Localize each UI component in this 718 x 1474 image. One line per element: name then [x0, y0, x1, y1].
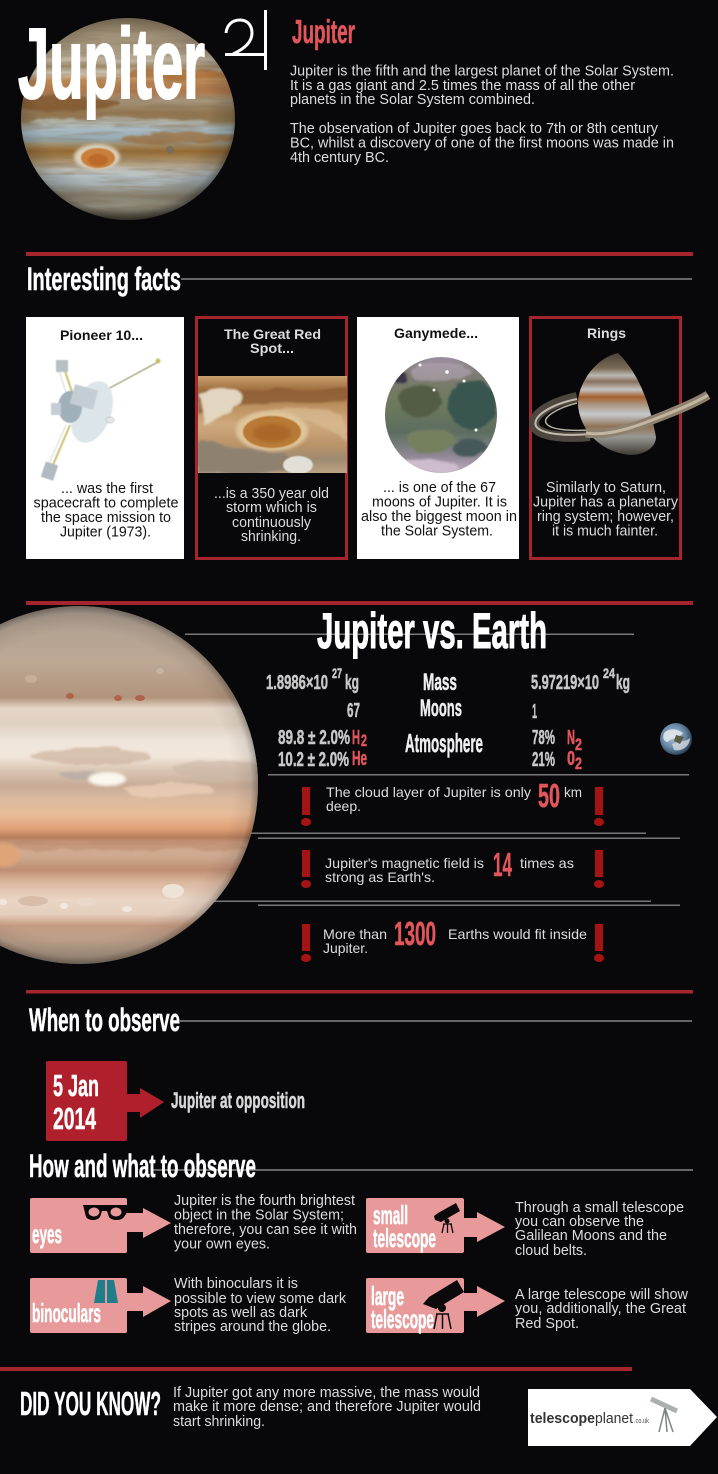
logo: telescopeplanet: .co.uk — [634, 1418, 649, 1425]
method text: small telescope: Galilean Moons and the — [515, 1227, 667, 1244]
method text: small telescope: cloud belts. — [515, 1242, 587, 1259]
method text: eyes: your own eyes. — [174, 1236, 270, 1252]
callout: opposition date: 5 Jan — [53, 1068, 99, 1103]
fact: magnetic field — [301, 846, 604, 888]
comparison table: atmosphere: 89.8 ± 2.0% — [278, 727, 350, 749]
intro text: Jupiter is the fifth and the largest planet of the Solar System. — [290, 62, 674, 80]
panel: Pioneer 10: ... was the first — [61, 480, 154, 497]
intro text: BC, whilst a discovery of one of the first moons was made in — [290, 134, 674, 152]
comparison table: mass: 24 — [603, 665, 615, 681]
big Jupiter planet image — [0, 606, 270, 965]
comparison table: atmosphere: H — [352, 727, 360, 749]
panel: Pioneer 10: Jupiter (1973). — [60, 524, 151, 540]
text: did you know — [173, 1384, 481, 1430]
intro text: It is a gas giant and 2.5 times the mass of all the other — [290, 77, 635, 94]
comparison table: atmosphere: 2 — [575, 754, 582, 773]
comparison table: mass: 27 — [332, 665, 342, 681]
method: eyes: eyes — [32, 1219, 62, 1249]
comparison table: atmosphere — [278, 727, 582, 773]
text: did you know: make it more dense; and therefore Jupiter would — [173, 1398, 481, 1415]
panel: The Great Red Spot: shrinking. — [241, 528, 301, 545]
fact: cloud layer: The cloud layer of Jupiter is only — [326, 784, 531, 800]
panel: Pioneer 10: Pioneer 10... — [60, 327, 143, 343]
heading: Did you know: DID YOU KNOW? — [20, 1385, 161, 1422]
image: Earth — [660, 723, 692, 755]
comparison table: atmosphere: N — [567, 727, 575, 749]
fact: magnetic field: 14 — [493, 846, 512, 883]
heading: How and what to observe: How and what to observe — [29, 1148, 256, 1184]
comparison table: mass: 5.97219×10 — [531, 672, 599, 694]
method: binoculars — [30, 1278, 171, 1333]
callout: opposition date — [46, 1061, 305, 1141]
method text: large telescope — [515, 1286, 688, 1332]
intro text: 4th century BC. — [290, 149, 389, 166]
comparison table: mass — [266, 665, 630, 696]
intro text — [290, 62, 674, 166]
comparison table: atmosphere: 21% — [532, 749, 555, 771]
panel: Ganymede: Ganymede... — [394, 325, 478, 341]
image: ringed Jupiter — [534, 353, 708, 455]
method: binoculars: binoculars — [32, 1298, 101, 1328]
panel: The Great Red Spot: continuously — [232, 514, 311, 531]
fact: magnetic field: times as — [520, 855, 574, 871]
panel: The Great Red Spot: storm which is — [226, 499, 317, 516]
method: large telescope: large — [371, 1281, 404, 1311]
intro text: planets in the Solar System combined. — [290, 91, 535, 108]
callout: opposition date: Jupiter at opposition — [171, 1088, 305, 1113]
panel: The Great Red Spot: Spot... — [250, 340, 294, 356]
panel: Pioneer 10 — [26, 317, 184, 559]
method: small telescope: small — [373, 1200, 408, 1230]
method text: eyes — [174, 1192, 357, 1252]
fact: Earths inside Jupiter: More than — [323, 926, 387, 942]
icon: exclamation marks — [301, 787, 604, 826]
logo: telescopeplanet: telescope — [530, 1410, 595, 1427]
method text: eyes: therefore, you can see it with — [174, 1221, 357, 1238]
logo: telescopeplanet — [528, 1389, 717, 1446]
method text: binoculars: stripes around the globe. — [174, 1318, 331, 1335]
method text: eyes: Jupiter is the fourth brightest — [174, 1192, 356, 1209]
panel: Ganymede: moons of Jupiter. It is — [372, 494, 507, 510]
fact: cloud layer: 50 — [538, 777, 560, 814]
heading: Jupiter vs. Earth: Jupiter vs. Earth — [317, 603, 547, 659]
method text: large telescope: you, additionally, the Great — [515, 1300, 687, 1317]
intro heading: Jupiter — [292, 13, 355, 50]
comparison table: moons: 67 — [347, 700, 360, 722]
main title: Jupiter: Jupiter — [18, 8, 205, 120]
method text: binoculars: spots as well as dark — [174, 1304, 307, 1321]
panel: The Great Red Spot: The Great Red — [224, 326, 321, 342]
comparison table: mass: Mass — [423, 669, 457, 696]
method text: small telescope: Through a small telescope — [515, 1199, 684, 1216]
comparison table: mass: kg — [616, 672, 630, 694]
method text: binoculars: With binoculars it is — [174, 1275, 298, 1292]
method text: eyes: object in the Solar System; — [174, 1206, 344, 1224]
comparison table: atmosphere: 0 — [567, 748, 575, 770]
fact: cloud layer: deep. — [326, 798, 361, 814]
comparison table: atmosphere: He — [352, 748, 367, 770]
icon: glasses — [83, 1205, 143, 1220]
panel: Rings: it is much fainter. — [552, 522, 658, 540]
icon: Pioneer 10 spacecraft — [41, 358, 160, 481]
panel: The Great Red Spot: ...is a 350 year old — [214, 485, 329, 502]
text: 1 — [532, 701, 537, 723]
logo: telescopeplanet: planet — [595, 1410, 634, 1427]
comparison table: atmosphere: 2 — [575, 735, 582, 754]
fact: Earths inside Jupiter: Jupiter. — [323, 940, 368, 956]
icon: logo telescope — [651, 1399, 677, 1432]
panel: Pioneer 10: spacecraft to complete — [34, 494, 178, 512]
panel: Rings — [530, 318, 708, 558]
panel: Rings: Rings — [587, 325, 626, 341]
panel: Pioneer 10: the space mission to — [41, 509, 171, 526]
comparison table: atmosphere: 2 — [361, 731, 367, 750]
icon: large telescope — [423, 1280, 464, 1329]
method text: small telescope — [515, 1199, 684, 1259]
callout: opposition date: 2014 — [53, 1101, 96, 1136]
panel: Ganymede: the Solar System. — [381, 522, 493, 540]
method: small telescope: telescope — [373, 1223, 436, 1253]
icon: small telescope — [434, 1203, 460, 1233]
text: did you know: If Jupiter got any more massive, the mass would — [173, 1384, 480, 1401]
icon: exclamation marks — [301, 850, 604, 888]
comparison table: mass: kg — [345, 672, 359, 694]
method text: large telescope: Red Spot. — [515, 1315, 579, 1332]
comparison table: atmosphere: 10.2 ± 2.0% — [278, 749, 349, 771]
method: small telescope — [366, 1198, 505, 1253]
comparison table: mass: 1.8986×10 — [266, 672, 328, 694]
comparison table: atmosphere: Atmosphere — [405, 728, 483, 758]
method text: small telescope: you can observe the — [515, 1213, 644, 1230]
fact: Earths inside Jupiter — [301, 915, 604, 962]
panel: Rings: Jupiter has a planetary — [533, 494, 678, 510]
panel: Ganymede: also the biggest moon in — [361, 508, 517, 525]
icon: Jupiter astronomical symbol — [225, 10, 266, 70]
method: eyes — [30, 1198, 171, 1253]
panel: The Great Red Spot — [196, 318, 347, 558]
icon: exclamation marks — [301, 924, 604, 962]
panel: Ganymede: ... is one of the 67 — [383, 479, 496, 496]
panel: Rings: Similarly to Saturn, — [546, 479, 666, 496]
fact: cloud layer: km — [564, 784, 582, 800]
comparison table: moons — [347, 695, 537, 723]
header: Jupiter planet image — [21, 18, 235, 220]
panel: Rings: ring system; however, — [537, 508, 674, 525]
method: large telescope: telescope — [371, 1304, 434, 1334]
fact: magnetic field: strong as Earth's. — [325, 869, 435, 885]
method text: binoculars: possible to view some dark — [174, 1290, 346, 1307]
intro text: The observation of Jupiter goes back to 7th or 8th century — [290, 120, 658, 137]
icon: binoculars — [94, 1280, 118, 1303]
heading: When to observe: When to observe — [29, 1002, 180, 1038]
fact: cloud layer — [301, 777, 604, 826]
method text: binoculars — [174, 1275, 346, 1335]
fact: Earths inside Jupiter: Earths would fit inside — [448, 926, 587, 942]
panel: Ganymede — [357, 317, 519, 559]
image: Great Red Spot — [198, 376, 347, 474]
image: Ganymede moon — [385, 357, 498, 473]
fact: magnetic field: Jupiter's magnetic field is — [325, 855, 484, 871]
text: did you know: start shrinking. — [173, 1413, 265, 1430]
method: large telescope — [366, 1278, 505, 1334]
comparison table: atmosphere: 78% — [532, 727, 555, 749]
fact: Earths inside Jupiter: 1300 — [394, 915, 436, 952]
comparison table: moons: Moons — [420, 695, 462, 722]
method text: large telescope: A large telescope will show — [515, 1286, 688, 1303]
heading: Interesting facts: Interesting facts — [27, 261, 181, 297]
